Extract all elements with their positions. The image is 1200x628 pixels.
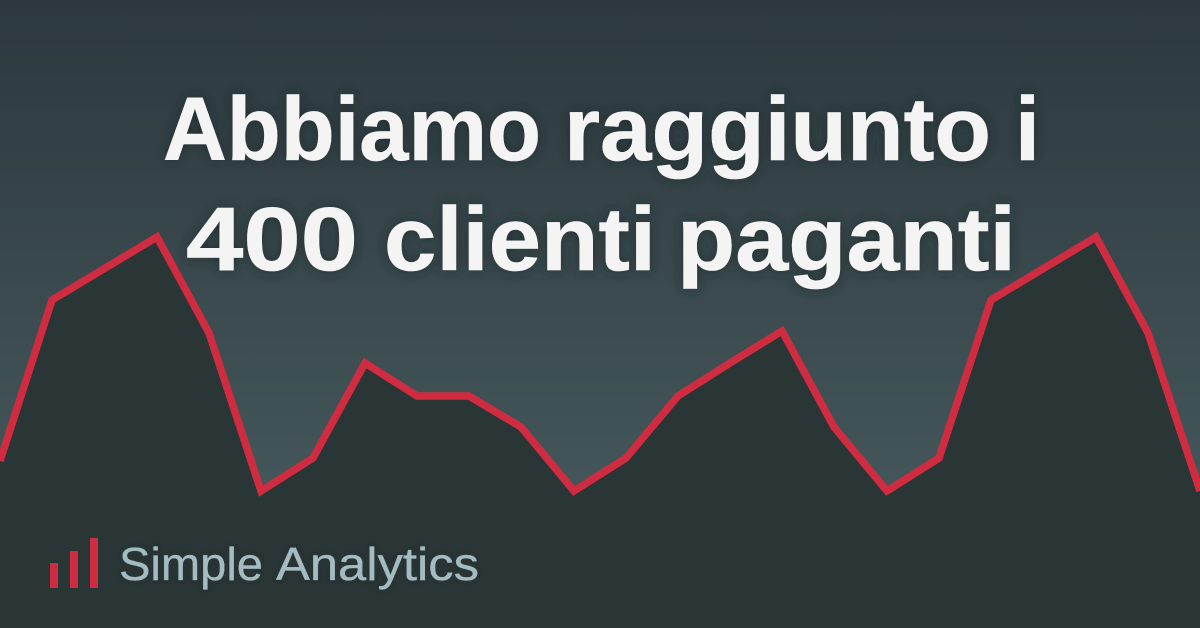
- icon: bar chart logo: [50, 538, 98, 588]
- title: [163, 80, 1040, 290]
- title: clienti: [384, 190, 656, 290]
- logo: [50, 538, 479, 590]
- title: i: [1015, 80, 1040, 180]
- title: Abbiamo: [163, 80, 541, 180]
- title: raggiunto: [564, 80, 991, 180]
- title: 400: [186, 190, 358, 290]
- brand name: Simple: [119, 538, 263, 590]
- chart area fill: [0, 237, 1200, 628]
- title: paganti: [677, 190, 1016, 290]
- chart line: [0, 237, 1200, 491]
- brand name: [119, 538, 479, 590]
- brand name: Analytics: [276, 538, 479, 590]
- area chart: [0, 237, 1200, 628]
